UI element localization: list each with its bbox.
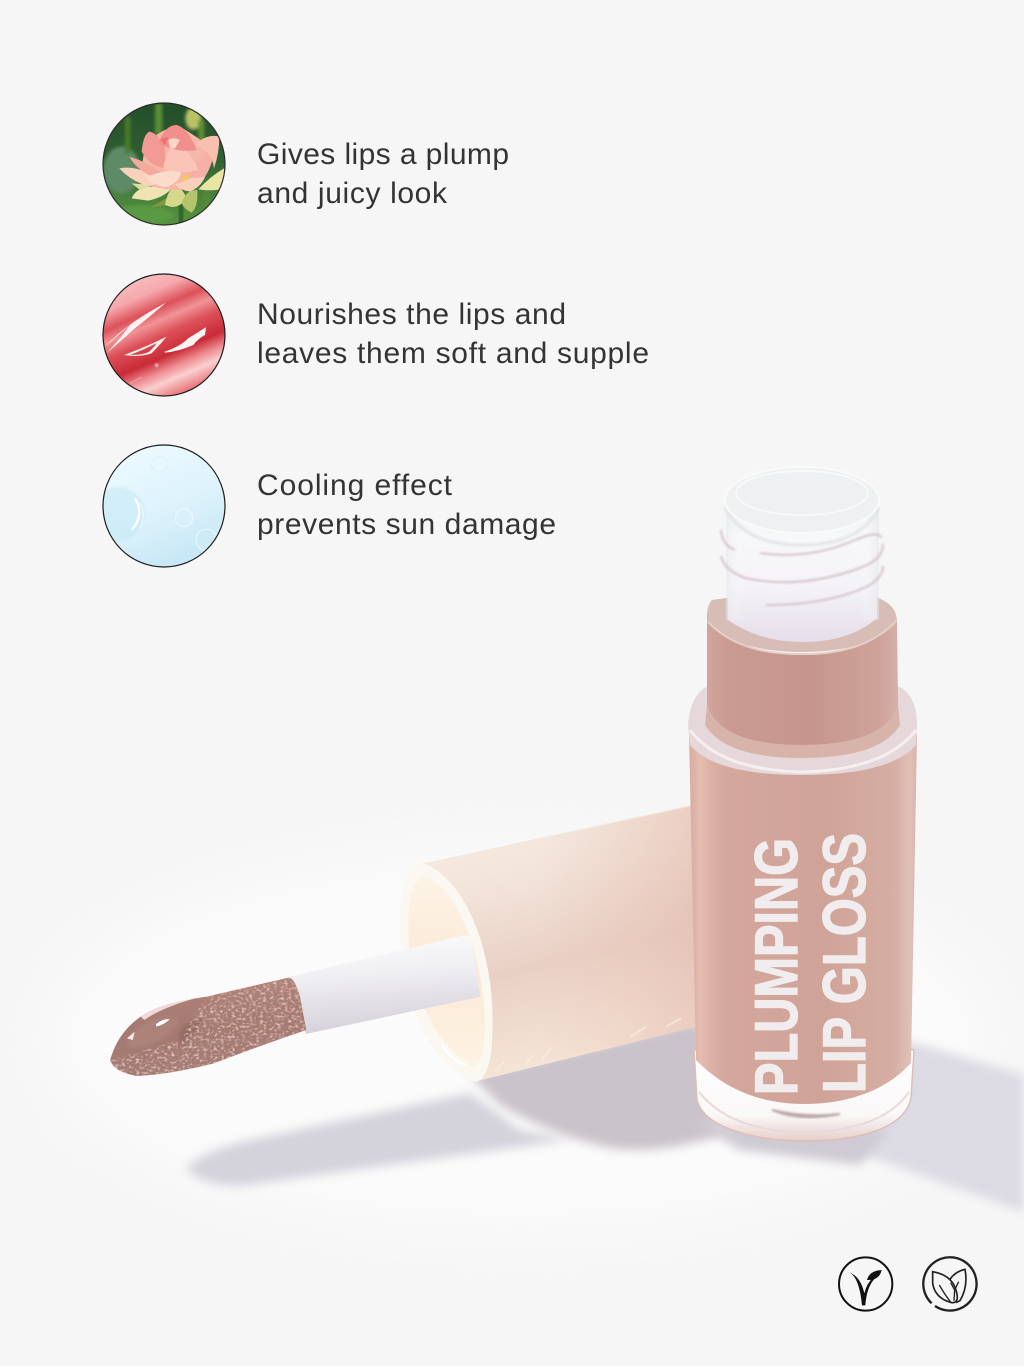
pink band under collar <box>705 705 900 758</box>
rim highlight <box>442 1045 465 1065</box>
applicator stem <box>290 935 481 1034</box>
icon: vegan <box>839 1257 892 1311</box>
lotus circle outline <box>103 103 225 225</box>
clear threaded neck <box>726 500 879 642</box>
bottle liquid <box>689 735 917 1104</box>
shoulder ring highlight <box>690 730 916 772</box>
bottle label text <box>743 833 878 1095</box>
cap interior <box>408 877 485 1067</box>
thread lines <box>721 530 883 605</box>
applicator tip <box>110 978 306 1076</box>
lip gloss bottle <box>688 467 917 1141</box>
neck top disc <box>725 467 879 533</box>
icon: leaves <box>923 1257 977 1311</box>
text: plump claim <box>257 138 509 210</box>
icon: water droplets <box>92 445 225 567</box>
text: nourishing claim: leaves them soft and supple <box>257 337 649 370</box>
text: plump claim: and juicy look <box>257 177 448 210</box>
neck lip shadow <box>725 508 879 545</box>
text: cooling claim: Cooling effect <box>257 469 453 502</box>
swatch circle outline <box>103 274 225 396</box>
droplet circle outline <box>103 445 225 567</box>
cap tube <box>421 805 697 1081</box>
text: nourishing claim: Nourishes the lips and <box>257 298 566 331</box>
neck top inner ring <box>736 471 868 515</box>
soft light around the product <box>50 850 990 1230</box>
neck edge shading <box>726 505 879 620</box>
text: cooling claim: prevents sun damage <box>257 508 556 541</box>
label: plumping: PLUMPING <box>743 838 810 1095</box>
feature 2: glossy swatch and nourishing claim <box>103 274 649 396</box>
collar <box>707 620 898 745</box>
shoulder ring <box>688 686 917 775</box>
base rim line <box>699 1092 909 1132</box>
feature 3: water droplets and cooling claim <box>92 445 556 567</box>
feature 1: lotus and plumping claim <box>103 103 509 227</box>
text: cooling claim <box>257 469 556 541</box>
text: plump claim: Gives lips a plump <box>257 138 509 171</box>
text: nourishing claim <box>257 298 649 370</box>
label: lip gloss: LIP GLOSS <box>811 833 878 1093</box>
glass base <box>694 1050 914 1141</box>
icon: lotus flower <box>103 103 225 227</box>
certification icons <box>839 1257 977 1311</box>
base reflection <box>772 1110 840 1117</box>
lip gloss cap and applicator <box>110 805 697 1082</box>
collar top face <box>707 598 897 652</box>
product shadows <box>186 1020 1024 1212</box>
collar inner edge <box>708 620 897 654</box>
infographic canvas <box>102 102 1024 1312</box>
cap printed marks <box>494 1018 681 1072</box>
cap opening rim <box>400 864 493 1082</box>
cap tube shading <box>537 805 697 1067</box>
icon: red gloss swatch <box>103 274 225 396</box>
